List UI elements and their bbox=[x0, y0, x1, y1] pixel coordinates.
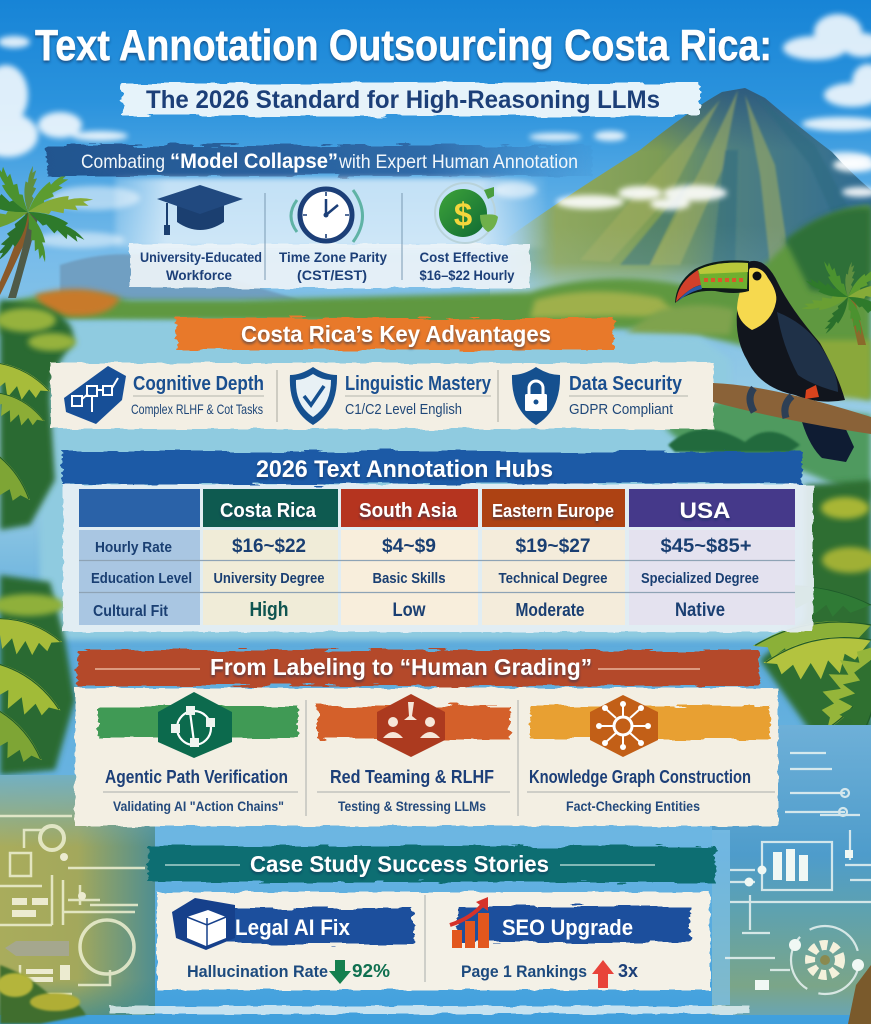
column: knowledge graph: Fact-Checking Entities bbox=[566, 798, 700, 814]
row: education level: Basic Skills bbox=[372, 570, 446, 587]
section banner: case studies bbox=[148, 846, 715, 882]
clouds bbox=[0, 14, 871, 248]
tagline banner: “Model Collapse” bbox=[170, 150, 338, 173]
panel: case studies bbox=[157, 892, 710, 990]
toucan wing bbox=[777, 312, 838, 392]
table header row: South Asia bbox=[359, 500, 458, 522]
distant hill and forest band bbox=[0, 205, 871, 400]
table column fills bbox=[79, 530, 795, 625]
column: red teaming bbox=[318, 694, 510, 814]
tech background right bbox=[712, 725, 871, 1024]
label: time zone parity: (CST/EST) bbox=[297, 267, 367, 283]
icon: red team bbox=[377, 694, 445, 757]
table header row: Costa Rica bbox=[220, 500, 317, 522]
toucan body bbox=[737, 261, 845, 402]
icon: knowledge graph bbox=[590, 695, 658, 757]
icon: clock bbox=[291, 189, 362, 242]
section banner: human grading bbox=[77, 650, 759, 686]
row: cultural fit: High bbox=[250, 599, 288, 621]
case: SEO upgrade: SEO Upgrade bbox=[502, 915, 633, 940]
label: university-educated workforce: University-Educated bbox=[140, 249, 262, 265]
icon: agent network bbox=[158, 692, 232, 758]
jungle below toucan bbox=[665, 340, 871, 500]
row: cultural fit: Moderate bbox=[516, 600, 584, 620]
row: cultural fit: Low bbox=[392, 600, 426, 621]
advantage: data security: Data Security bbox=[569, 373, 683, 395]
row: education level: University Degree bbox=[214, 570, 324, 587]
volcano mountain bbox=[490, 88, 871, 300]
bottom strip bbox=[110, 1006, 750, 1014]
icon: dollar coin bbox=[435, 183, 498, 243]
column: knowledge graph: Knowledge Graph Construction bbox=[529, 767, 751, 787]
row: hourly rate: $19~$27 bbox=[516, 536, 590, 557]
panel: key advantages bbox=[51, 363, 714, 429]
row: education level: Education Level bbox=[91, 570, 192, 587]
label: cost effective: $16–$22 Hourly bbox=[420, 267, 515, 283]
section banner: key advantages: Costa Rica’s Key Advantages bbox=[241, 321, 551, 347]
icon: shield check bbox=[290, 367, 337, 425]
panel: human grading bbox=[75, 688, 778, 826]
panel: why Costa Rica highlights bbox=[115, 178, 545, 288]
row: education level: Specialized Degree bbox=[641, 570, 759, 587]
toucan on branch bbox=[675, 260, 871, 462]
advantage: linguistic mastery bbox=[345, 373, 492, 418]
title: Text Annotation Outsourcing Costa Rica: bbox=[35, 21, 772, 70]
case: legal AI fix: Hallucination Rate bbox=[187, 962, 328, 981]
icon: rising bar chart bbox=[450, 897, 489, 948]
row: cultural fit: Cultural Fit bbox=[93, 603, 169, 620]
tagline banner bbox=[47, 145, 592, 176]
case: SEO upgrade bbox=[450, 897, 690, 988]
toucan chest and face bbox=[737, 268, 776, 330]
row: hourly rate: $4~$9 bbox=[382, 536, 436, 557]
table header row bbox=[79, 489, 795, 527]
advantage: cognitive depth: Cognitive Depth bbox=[133, 373, 264, 395]
column: agentic path verification: Validating AI "Action Chains" bbox=[113, 798, 284, 814]
row: cultural fit bbox=[93, 599, 725, 621]
icon: legal cube bbox=[172, 898, 235, 950]
advantage: linguistic mastery: C1/C2 Level English bbox=[345, 401, 462, 418]
icon: dollar coin: $ bbox=[454, 196, 472, 233]
column: agentic path verification bbox=[98, 692, 298, 814]
icon: padlock shield bbox=[512, 367, 560, 425]
column: knowledge graph bbox=[529, 695, 770, 814]
toucan beak bbox=[675, 260, 749, 303]
row: cultural fit: Native bbox=[675, 600, 725, 621]
case: SEO upgrade: 3x bbox=[618, 961, 638, 981]
case: legal AI fix bbox=[172, 898, 413, 984]
section banner: text annotation hubs: 2026 Text Annotation Hubs bbox=[256, 456, 553, 483]
advantage: data security bbox=[569, 373, 683, 418]
column: red teaming: Red Teaming & RLHF bbox=[330, 767, 494, 787]
subtitle banner: The 2026 Standard for High-Reasoning LLMs bbox=[146, 86, 660, 114]
panel: hubs table background bbox=[63, 484, 813, 632]
icon: cognitive network bbox=[64, 366, 126, 424]
row: hourly rate: Hourly Rate bbox=[95, 539, 172, 556]
advantage: data security: GDPR Compliant bbox=[569, 401, 674, 418]
label: university-educated workforce: Workforce bbox=[166, 267, 232, 283]
toucan feet bbox=[750, 388, 792, 418]
label: time zone parity: Time Zone Parity bbox=[279, 249, 387, 265]
row: education level: Technical Degree bbox=[498, 570, 608, 587]
icon: up arrow bbox=[592, 960, 614, 988]
case: legal AI fix: 92% bbox=[352, 961, 390, 981]
forest: right side bbox=[751, 259, 871, 746]
table header row: Eastern Europe bbox=[492, 501, 614, 521]
icon: down arrow bbox=[329, 960, 351, 984]
advantage: linguistic mastery: Linguistic Mastery bbox=[345, 373, 492, 395]
row: education level bbox=[91, 570, 759, 587]
advantage: cognitive depth bbox=[131, 373, 264, 417]
lake bbox=[40, 321, 790, 640]
case: legal AI fix: Legal AI Fix bbox=[235, 915, 351, 940]
branch bbox=[713, 383, 871, 434]
tagline banner: with Expert Human Annotation bbox=[338, 152, 578, 173]
column: red teaming: Testing & Stressing LLMs bbox=[338, 798, 486, 814]
forest: left side bbox=[0, 162, 95, 779]
comparison table bbox=[79, 489, 795, 625]
toucan tail bbox=[800, 412, 854, 462]
tagline banner: Combating bbox=[81, 152, 165, 173]
icon: graduation cap bbox=[157, 185, 243, 235]
label: cost effective: Cost Effective bbox=[420, 249, 509, 265]
column: agentic path verification: Agentic Path Verification bbox=[105, 767, 288, 787]
section banner: key advantages bbox=[176, 318, 614, 350]
tech background left bbox=[0, 775, 155, 1024]
row: hourly rate: $45~$85+ bbox=[660, 536, 752, 557]
advantage: cognitive depth: Complex RLHF & Cot Tasks bbox=[131, 401, 263, 417]
case: SEO upgrade: Page 1 Rankings bbox=[461, 962, 587, 981]
section banner: text annotation hubs bbox=[62, 451, 802, 484]
row: hourly rate bbox=[95, 536, 752, 557]
row: hourly rate: $16~$22 bbox=[232, 536, 306, 557]
section banner: case studies: Case Study Success Stories bbox=[250, 851, 549, 877]
section banner: human grading: From Labeling to “Human Grading” bbox=[210, 654, 592, 680]
table header row: USA bbox=[680, 498, 731, 523]
